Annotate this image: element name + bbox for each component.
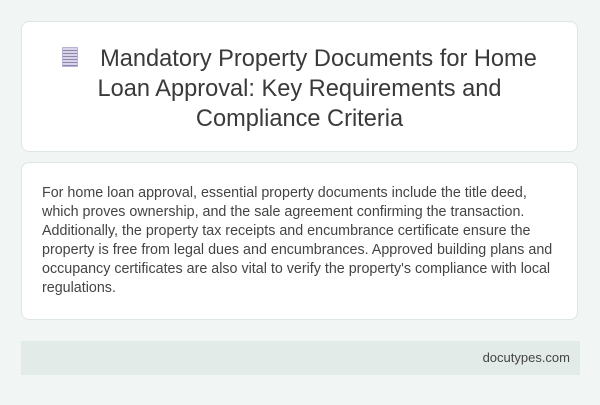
panel: title card: [21, 21, 578, 152]
text block: For home loan approval, essential property documents include the title deed, which proves ownership, and the sale agreement confirming the transaction. Additionally, the property tax receipts and encumbrance certificate ensure the property is free from legal dues and encumbrances. Approved building plans and occupancy certificates are also vital to verify the property's compliance with local regulations.: [42, 185, 552, 296]
panel: description: [21, 162, 578, 320]
icon: document: [62, 47, 78, 67]
title: Mandatory Property Documents for Home Loan Approval: Key Requirements and Compliance Criteria: [98, 46, 537, 132]
footer text: docutypes.com: [483, 350, 570, 365]
footer bar: [21, 341, 580, 375]
